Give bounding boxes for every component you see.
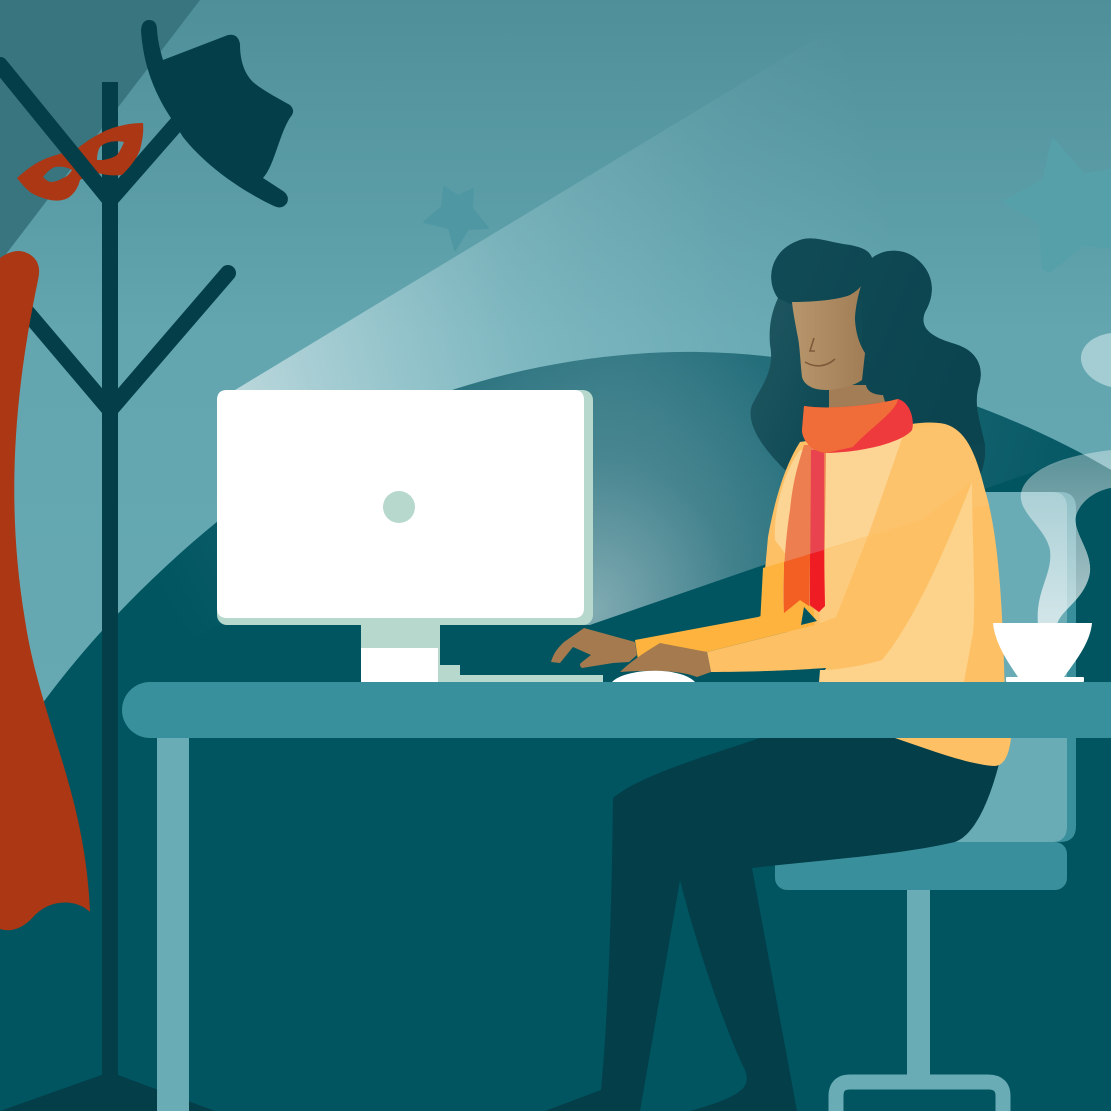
light beam	[235, 30, 1111, 625]
cloud	[1081, 333, 1111, 387]
floor	[0, 455, 1111, 1111]
hair back	[751, 238, 985, 500]
light beam glow on hill	[454, 354, 786, 625]
scarf hanging	[783, 445, 826, 613]
far hand	[551, 628, 637, 668]
steam	[1021, 450, 1111, 625]
sweater lit upper	[868, 424, 990, 536]
scarf collar	[802, 399, 913, 453]
dark corner wedge	[0, 0, 200, 262]
monitor	[217, 390, 593, 682]
far arm	[635, 600, 815, 660]
gap between arms	[801, 607, 817, 625]
sweater pale wedge	[819, 482, 974, 682]
trousers	[545, 738, 1000, 1111]
near arm	[707, 482, 972, 672]
keyboard	[438, 665, 603, 682]
desk leg	[157, 738, 189, 1111]
body sweater	[760, 423, 1005, 700]
face	[792, 286, 865, 390]
hill	[0, 352, 1111, 1111]
floor dark panel right of steam	[1076, 488, 1111, 842]
person	[545, 238, 1011, 1111]
sweater pale fold upper	[775, 430, 905, 560]
sweater lower-left orange	[760, 554, 815, 630]
near hand	[620, 643, 711, 677]
sweater fold below beam	[818, 536, 868, 640]
coat rack	[0, 82, 228, 1111]
star small	[424, 187, 488, 250]
desk top	[122, 682, 1111, 738]
rack left arm over mask	[0, 65, 110, 200]
chair seat and stand	[775, 842, 1067, 1111]
mouse	[612, 671, 695, 682]
neck	[829, 385, 886, 410]
monitor logo	[383, 491, 415, 523]
chair back	[950, 492, 1076, 842]
front hair	[771, 238, 985, 445]
hat on rack	[141, 20, 293, 207]
sweater hem	[895, 738, 1011, 766]
star large	[1004, 140, 1111, 271]
cape	[0, 251, 90, 930]
coffee cup	[993, 623, 1092, 682]
mask	[17, 123, 143, 201]
nose and smile	[805, 338, 835, 366]
